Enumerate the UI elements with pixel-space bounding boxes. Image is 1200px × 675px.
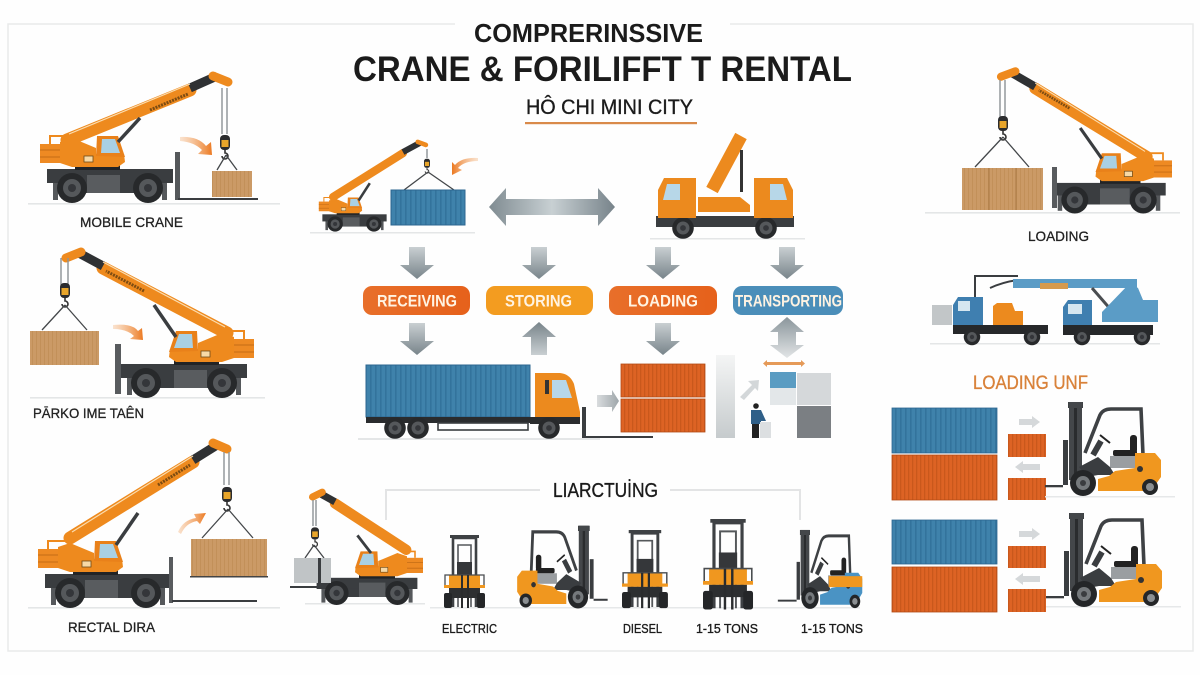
small containers (1008, 434, 1046, 500)
fork (175, 152, 258, 200)
wooden crate (190, 539, 268, 578)
panel: container truck (358, 365, 653, 440)
wooden crate (30, 331, 99, 365)
crane vehicle (1001, 71, 1172, 214)
wooden crate (962, 168, 1043, 210)
label: tons one: 1-15 TONS (696, 621, 758, 636)
forklift lineup (430, 519, 862, 610)
blue boom (1013, 279, 1137, 311)
forklift (1046, 513, 1181, 608)
label: mobile crane: MOBILE CRANE (80, 214, 183, 230)
crane vehicle (319, 142, 426, 232)
fork post (1052, 167, 1057, 208)
panel: third crane (28, 443, 280, 635)
crane vehicle (313, 492, 423, 605)
forklift (1045, 402, 1175, 498)
orange curved arrow (113, 325, 143, 340)
crane vehicle (66, 252, 254, 398)
double arrow between crane and truck (489, 188, 615, 226)
crane vehicle (40, 76, 228, 203)
transfer arrows (1015, 528, 1040, 585)
forklift side: blue (778, 530, 862, 609)
panel: blue crane trucks (930, 276, 1160, 345)
title: comprehensive line: COMPRERINSSIVE (474, 18, 703, 48)
truck chassis and wheels (656, 216, 794, 239)
label: electric: ELECTRIC (442, 621, 497, 636)
panel: centre crane truck (650, 136, 805, 240)
hook and sling (202, 452, 253, 538)
blue container (366, 365, 530, 417)
blue container (391, 190, 465, 225)
crane vehicle (38, 443, 227, 608)
panel: second crane (30, 252, 265, 421)
fork post (115, 344, 121, 394)
title: main heading: CRANE & FORILIFFT T RENTAL (353, 50, 852, 89)
hook and sling (42, 258, 87, 330)
process steps (363, 286, 843, 315)
orange curved arrow (452, 158, 478, 175)
step: loading (609, 286, 717, 315)
hook and sling (404, 149, 454, 190)
heading: lineup: LIARCTUİNG (553, 479, 658, 502)
hook and sling (217, 88, 237, 170)
worker with machine (751, 403, 771, 438)
panel: mobile crane (28, 76, 280, 230)
label: diesel: DIESEL (623, 621, 662, 636)
panel: lineup crane (290, 492, 425, 605)
heading: loading unit: LOADING UNF (973, 373, 1088, 394)
step: loading: LOADING (628, 292, 698, 310)
flow arrows row one (400, 247, 804, 279)
step: storing (486, 286, 593, 315)
label: loading: LOADING (1028, 228, 1089, 244)
chassis and wheels (366, 417, 551, 439)
fork (169, 557, 257, 603)
fork (290, 558, 321, 588)
panel: right loading crane (925, 71, 1180, 244)
diagonal arrow (740, 380, 759, 400)
wooden crate (212, 171, 252, 197)
container stack (892, 520, 997, 612)
storage boxes (770, 372, 831, 438)
forklift front: diesel (622, 530, 668, 608)
fork (582, 407, 653, 438)
left blue truck (932, 276, 1048, 345)
transfer arrows (1015, 416, 1040, 473)
subtitle: city: HÔ CHI MINI CITY (526, 96, 693, 119)
forklift front: electric (444, 535, 485, 608)
panel: centre crane with container (310, 142, 478, 234)
label: third crane: RECTAL DIRA (68, 619, 156, 635)
title block (353, 18, 852, 124)
hook and sling (975, 80, 1029, 167)
lineup labels (442, 621, 863, 636)
truck cab (530, 373, 580, 439)
warehouse group (740, 360, 831, 438)
hook and sling (305, 500, 324, 558)
orange curved arrow (178, 513, 206, 534)
small containers (1008, 546, 1046, 612)
truck cabs (658, 178, 793, 218)
container stack (892, 408, 997, 500)
flow arrows row two (400, 317, 804, 358)
warehouse column (716, 355, 735, 438)
panel: container loading upper (892, 402, 1175, 500)
label: tons two: 1-15 TONS (801, 621, 863, 636)
forklift side: orange (517, 526, 608, 608)
stacked orange containers (621, 364, 705, 432)
orange curved arrow (180, 137, 212, 155)
small right arrow (597, 390, 619, 412)
panel: container loading lower (892, 513, 1181, 612)
right blue truck (1063, 283, 1158, 345)
grey load (294, 558, 331, 583)
step: transporting: TRANSPORTING (735, 292, 842, 310)
step: receiving (363, 286, 470, 315)
crane body and boom (698, 136, 750, 212)
orange double arrow (763, 360, 805, 367)
label: second crane: PĀRKO IME TAÊN (33, 405, 144, 421)
step: transporting (733, 286, 843, 315)
forklift front: tall mast (703, 519, 753, 610)
bracket behind lineup heading (386, 490, 800, 520)
step: storing: STORING (505, 292, 572, 310)
step: receiving: RECEIVING (377, 292, 457, 310)
